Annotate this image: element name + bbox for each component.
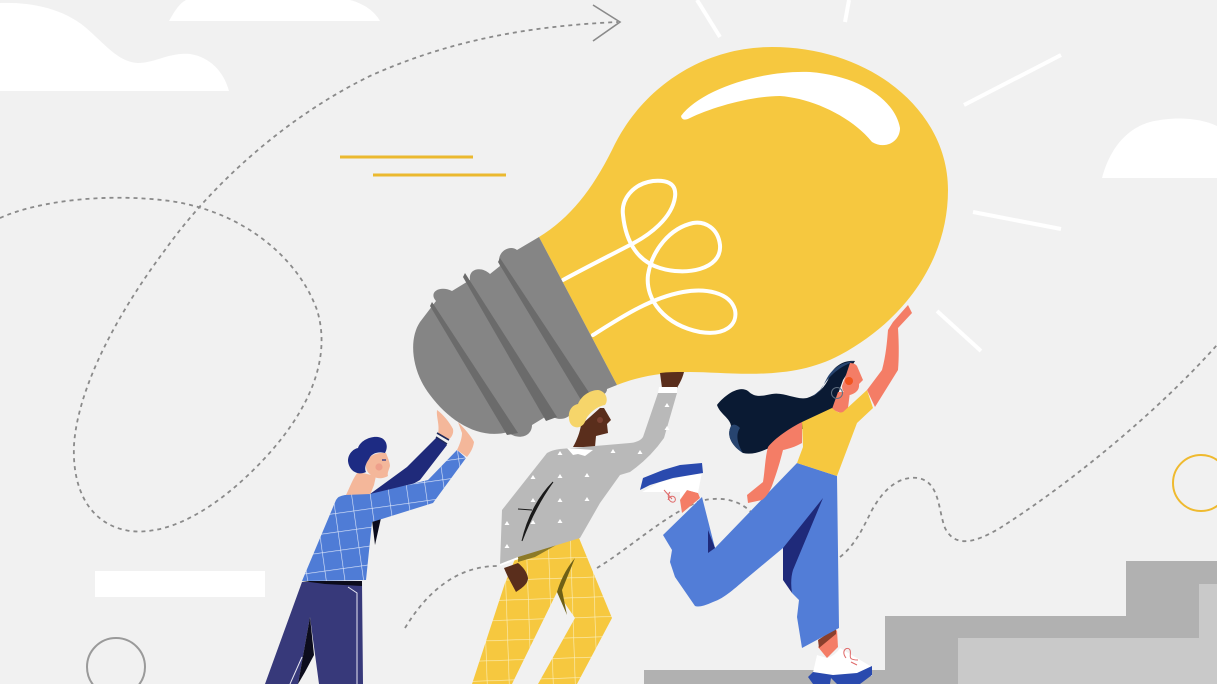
neck and face <box>573 408 611 447</box>
raised shoe top <box>640 463 703 490</box>
yellow circle outline <box>1173 455 1217 511</box>
bulb screw base <box>413 237 617 437</box>
fist <box>504 563 528 592</box>
lower leg <box>818 630 838 658</box>
light rays <box>697 0 1061 351</box>
back hand <box>437 410 453 440</box>
sweater crease <box>518 482 553 541</box>
neck <box>346 472 376 495</box>
person: man in blue shirt <box>265 410 474 684</box>
light bulb <box>413 47 948 437</box>
cheek <box>845 377 853 385</box>
collar <box>567 448 593 456</box>
yellow top <box>797 390 873 476</box>
cloud: top centre <box>169 0 380 21</box>
person: woman in yellow top <box>640 305 912 684</box>
lower arm <box>747 422 802 503</box>
bulb highlight <box>681 72 900 145</box>
upper hand <box>660 372 684 388</box>
grey circle outline <box>87 638 145 684</box>
hair highlights <box>729 361 855 453</box>
sweater triangles <box>504 403 670 548</box>
trousers <box>663 463 839 648</box>
cloud: right <box>1102 119 1217 178</box>
wristband <box>436 433 449 444</box>
sleeve cuff <box>658 387 677 393</box>
hem <box>500 558 518 565</box>
lower leg shadow <box>818 628 836 648</box>
base grooves <box>430 258 590 435</box>
cloud: top left <box>0 3 229 91</box>
hair <box>717 361 855 454</box>
cheek <box>375 463 383 471</box>
cheek <box>597 417 603 423</box>
shirt <box>302 450 466 581</box>
back arm <box>370 437 447 500</box>
trousers <box>472 538 612 684</box>
face <box>842 363 863 395</box>
stairs <box>644 561 1217 684</box>
front hand <box>457 422 474 457</box>
dashed looping path with arrow <box>0 5 620 532</box>
bulb glass <box>539 47 948 385</box>
raised shoe <box>642 472 702 499</box>
yellow speed lines <box>340 157 506 175</box>
head <box>366 453 390 478</box>
person: man in grey sweater <box>472 372 684 684</box>
raised shoe scribble <box>664 490 675 502</box>
dark torso gap <box>372 518 381 545</box>
eye <box>382 459 386 461</box>
shoe scribble <box>844 648 858 665</box>
white rectangle <box>95 571 265 597</box>
trouser details <box>290 581 362 684</box>
hair <box>569 390 607 427</box>
filament <box>563 181 735 335</box>
lower shoe sole <box>808 666 872 684</box>
earring <box>832 388 842 398</box>
dashed path lower right <box>405 345 1217 628</box>
raised arm <box>867 305 912 407</box>
lower shoe <box>812 648 872 677</box>
hair <box>348 437 387 473</box>
sweater <box>500 393 677 565</box>
trousers <box>265 582 363 684</box>
back foot skin <box>680 490 700 513</box>
trouser shadows <box>708 498 823 593</box>
trouser shadows <box>518 539 575 615</box>
neck <box>832 392 850 414</box>
